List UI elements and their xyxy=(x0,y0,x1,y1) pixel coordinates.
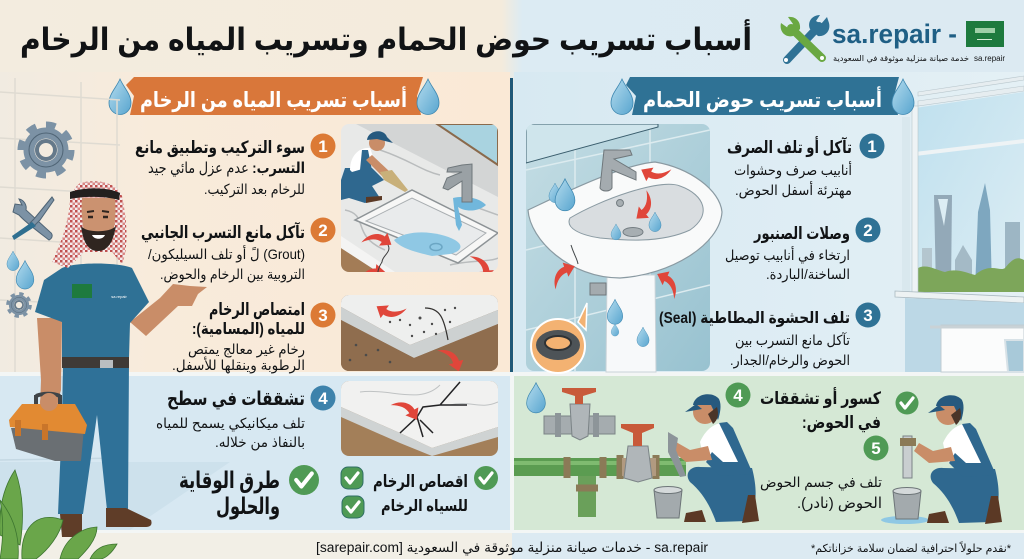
rust section xyxy=(622,458,656,476)
banner: sink causes xyxy=(611,77,914,115)
item heading: كسور أو تشققات xyxy=(760,387,881,409)
bucket xyxy=(893,488,921,519)
footer background xyxy=(0,533,1024,559)
prevention heading xyxy=(179,465,319,520)
item text line 1: تلف في جسم الحوض xyxy=(760,474,882,491)
panel divider xyxy=(510,78,513,372)
sink basin xyxy=(569,184,703,240)
number 1 xyxy=(310,134,336,158)
numeral: 2 xyxy=(863,221,873,240)
shirt xyxy=(35,264,149,358)
item text line 4: الرطوبة وينقلها للأسفل. xyxy=(172,356,305,374)
panel: green lower causes xyxy=(514,376,1024,530)
sink item 3 xyxy=(659,302,880,369)
title: أسباب تسريب حوض الحمام وتسريب المياه من الرخام xyxy=(20,19,752,58)
check mark xyxy=(296,474,312,486)
sink basin xyxy=(366,198,486,255)
numeral: 2 xyxy=(318,221,328,240)
right arm pointing xyxy=(130,284,207,336)
item heading: وصلات الصنبور xyxy=(753,224,850,244)
main valve body xyxy=(624,446,652,482)
item 3: marble xyxy=(172,300,336,374)
cabinet wood xyxy=(341,320,498,371)
number 2 xyxy=(856,218,880,242)
numeral: 5 xyxy=(871,439,881,458)
green item 5 xyxy=(760,436,888,512)
green item 4 xyxy=(726,382,881,433)
right top panel background xyxy=(514,72,1024,372)
banner text: أسباب تسريب المياه من الرخام xyxy=(140,85,407,112)
green pipe highlight xyxy=(514,461,686,465)
number 5 xyxy=(864,436,888,460)
smile xyxy=(92,235,105,239)
numeral: 1 xyxy=(318,137,328,156)
glass xyxy=(915,92,1024,292)
chest logo: sa.repair xyxy=(111,294,127,299)
heading line 1: طرق الوقاية xyxy=(179,467,280,494)
logo xyxy=(781,15,1005,63)
couplings rusty xyxy=(567,455,656,488)
bucket xyxy=(654,486,682,518)
hand on toolbox xyxy=(40,393,58,411)
window top frame xyxy=(918,76,1024,106)
check mark xyxy=(347,502,359,512)
item text line 2: تآكل مانع التسرب بين xyxy=(735,332,850,349)
illustration: bathroom sink xyxy=(526,124,722,373)
check mark xyxy=(480,473,492,483)
logo wordmark: sa.repair - xyxy=(832,19,957,49)
window with skyline xyxy=(895,76,1024,372)
illustration: leaking pipes and valves xyxy=(514,383,686,517)
icon: drop left xyxy=(611,79,633,114)
drops xyxy=(549,183,561,203)
item text line 3: رخام غير معالج يمتص xyxy=(188,341,305,358)
trees xyxy=(915,258,1024,292)
green main pipe xyxy=(514,458,686,476)
belt buckle xyxy=(100,360,113,368)
number 4 xyxy=(726,382,750,408)
left arm xyxy=(37,318,62,408)
water puddle xyxy=(881,516,929,524)
sink body xyxy=(528,162,722,278)
numeral: 3 xyxy=(863,306,873,325)
illustration: porous marble xyxy=(341,295,498,373)
technician figure xyxy=(35,181,207,537)
backsplash and mirror xyxy=(356,124,498,197)
item text line 3: التروبية بين الرخام والحوض. xyxy=(160,266,305,283)
toolbox xyxy=(9,394,87,461)
illustration: cracked marble xyxy=(341,381,498,456)
towel xyxy=(941,325,1024,372)
footer: note: *نقدم حلولاً احترافية لضمان سلامة خزاناتكم* xyxy=(811,540,1012,555)
item heading: تآكل أو تلف الصرف xyxy=(727,136,852,158)
number 3 xyxy=(856,302,880,328)
crack xyxy=(378,245,389,272)
upper grey pipe xyxy=(544,416,615,434)
beard xyxy=(81,226,116,251)
sink item 2 xyxy=(725,218,880,283)
pipe collar xyxy=(900,438,916,446)
item text line 2: أنابيب صرف وحشوات xyxy=(734,161,852,179)
item text line 3: بالنفاذ من خلاله. xyxy=(215,434,305,451)
upper pipe couplings xyxy=(558,413,596,437)
item heading: سوء التركيب وتطبيق مانع xyxy=(135,138,305,158)
sink rim xyxy=(355,190,498,263)
item text line 2: الحوض (نادر). xyxy=(797,495,882,512)
icon: drop right xyxy=(417,79,439,114)
item text line 2: (Grout) لً أو تلف السيليكون/ xyxy=(148,245,305,263)
item text line 3: للرخام بعد التركيب. xyxy=(204,181,305,198)
sink item 1 xyxy=(727,134,884,199)
item heading: تشققات في سطح xyxy=(167,389,305,410)
upper valve handle xyxy=(562,388,596,404)
icon: small drops xyxy=(7,251,34,289)
arrow xyxy=(390,402,418,420)
mirror xyxy=(526,124,658,163)
numeral: 3 xyxy=(318,306,328,325)
arrows xyxy=(362,233,392,246)
number 3 xyxy=(310,302,336,328)
marble top xyxy=(341,381,498,448)
window jamb xyxy=(902,117,910,292)
skyline xyxy=(922,183,1020,290)
marble edge xyxy=(341,307,498,358)
main valve handle xyxy=(621,424,654,446)
crack xyxy=(571,245,578,264)
heading line 2: والحلول xyxy=(216,493,280,520)
item heading line 2: للمياه (المسامية): xyxy=(192,321,305,338)
window jamb inner xyxy=(912,106,918,292)
icon: drop left xyxy=(109,79,131,114)
icon: check xyxy=(896,392,918,414)
floor xyxy=(0,462,230,530)
panel: marble lower causes xyxy=(0,376,510,530)
marble top xyxy=(341,295,498,345)
wrench xyxy=(668,432,686,477)
logo tagline: خدمة صيانة منزلية موثوقة في السعودية xyxy=(833,54,969,63)
faucet xyxy=(600,150,636,191)
gasket callout xyxy=(531,303,587,373)
logo small name: sa.repair xyxy=(974,54,1005,63)
list item: اقصاص الرخام xyxy=(373,472,468,492)
upper valve body xyxy=(570,404,590,440)
faucet xyxy=(443,164,472,202)
item heading: تلف الحشوة المطاطية (Seal) xyxy=(659,310,850,327)
item text line 3: الساخنة/الباردة. xyxy=(766,266,850,283)
wall tile xyxy=(905,298,1024,372)
worker with wrench xyxy=(668,394,759,523)
eyes xyxy=(87,211,109,212)
cracks xyxy=(400,382,467,437)
chest badge xyxy=(72,284,92,298)
list item: للسياه الرخام xyxy=(381,498,468,515)
window sill xyxy=(895,291,1024,303)
icon: check xyxy=(289,465,319,495)
keffiyeh xyxy=(52,181,126,268)
footer: site credit: sa.repair - خدمات صيانة منزلية موثوقة في السعودية [sarepair.com] xyxy=(316,540,709,556)
icon: crossed wrenches xyxy=(781,15,829,62)
towel bar xyxy=(930,326,1024,328)
illustration: sealing marble sink xyxy=(341,124,498,285)
number 2 xyxy=(310,218,336,242)
numeral: 1 xyxy=(867,137,877,156)
icon: drop xyxy=(527,383,545,413)
number 4 xyxy=(310,386,336,410)
marble edge xyxy=(341,407,498,456)
window transom xyxy=(915,141,1024,154)
overflow xyxy=(616,200,624,206)
number 1 xyxy=(860,134,884,158)
banner text: أسباب تسريب حوض الحمام xyxy=(643,85,882,112)
water pool xyxy=(394,232,460,256)
icon: check xyxy=(474,466,498,490)
item text line 2: التسرب: عدم عزل مائي جيد xyxy=(148,160,305,178)
drain xyxy=(430,244,442,250)
item heading: تآكل مانع التسرب الجانبي xyxy=(141,221,305,243)
icon: check box xyxy=(341,467,363,489)
icon: drop right xyxy=(892,79,914,114)
arrows xyxy=(640,167,671,183)
item 4: marble xyxy=(156,386,336,451)
pedestal xyxy=(606,275,656,372)
prevention list xyxy=(341,466,498,518)
towel ring xyxy=(1005,340,1024,372)
trousers xyxy=(58,362,129,514)
icon: crossed tools xyxy=(12,197,54,240)
water on counter xyxy=(453,197,486,231)
wall tile backdrop behind technician xyxy=(0,78,120,460)
pipe xyxy=(590,283,606,295)
item text line 3: الحوض والرخام/الجدار. xyxy=(730,352,850,369)
face xyxy=(82,198,115,251)
icon: check box xyxy=(342,496,364,518)
icon: small gear xyxy=(8,294,30,316)
drain xyxy=(623,228,643,236)
marble veins xyxy=(345,150,498,265)
held pipe xyxy=(903,436,912,478)
item heading: امتصاص الرخام xyxy=(209,300,305,320)
icon: large gear xyxy=(21,125,71,175)
banner: marble causes xyxy=(109,77,439,115)
agal xyxy=(70,188,120,200)
panel gutters xyxy=(0,372,1024,533)
plant xyxy=(0,470,117,559)
T branch down xyxy=(578,476,596,517)
boots xyxy=(60,508,152,537)
left top panel background xyxy=(0,72,510,372)
item 1: marble xyxy=(135,134,336,198)
numeral: 4 xyxy=(733,386,743,405)
item 2: marble xyxy=(141,218,336,283)
item heading line 2: في الحوض: xyxy=(802,413,881,433)
numeral: 4 xyxy=(318,389,328,408)
item text line 2: تلف ميكانيكي يسمح للمياه xyxy=(156,415,305,432)
veins xyxy=(360,385,498,405)
pores xyxy=(349,307,456,363)
icon: medium drop xyxy=(16,261,34,289)
worker with pipe xyxy=(900,395,1002,524)
item text line 2: ارتخاء في أنابيب توصيل xyxy=(725,246,850,264)
tiled wall xyxy=(526,124,710,371)
cabinet xyxy=(341,248,373,272)
check mark xyxy=(346,473,358,483)
arrows xyxy=(376,305,406,318)
belt xyxy=(62,357,129,368)
crack xyxy=(425,308,448,340)
pupils xyxy=(88,216,108,218)
icon: Saudi flag xyxy=(966,21,1004,47)
worker sealing xyxy=(341,131,408,203)
item text line 3: مهترئة أسفل الحوض. xyxy=(735,181,852,199)
